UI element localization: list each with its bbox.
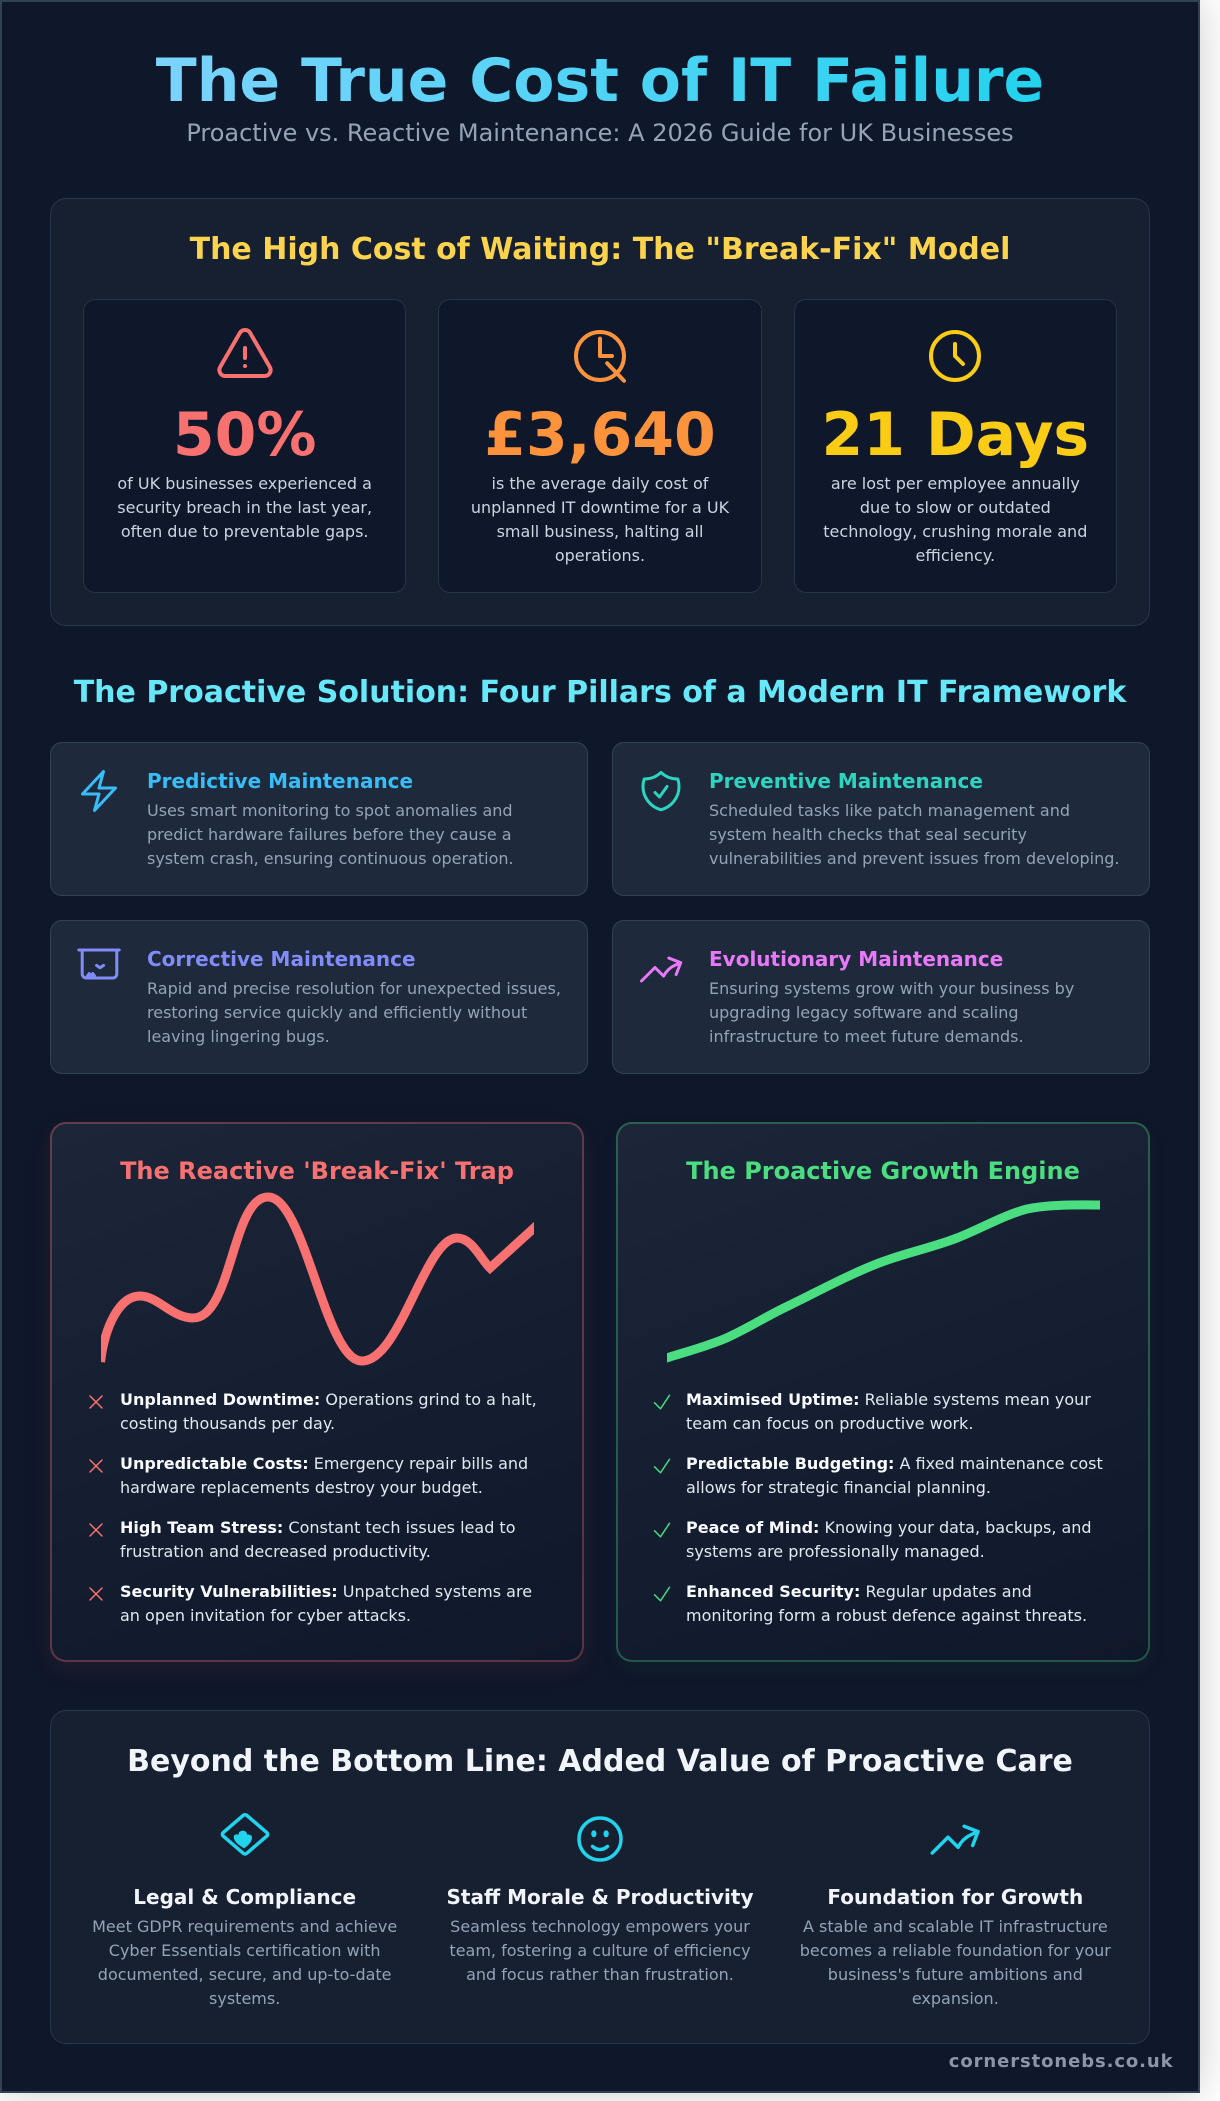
pillar description: Rapid and precise resolution for unexpected issues, xyxy=(147,979,561,998)
item text: Predictable Budgeting: A fixed maintenance cost xyxy=(686,1454,1103,1473)
value description xyxy=(438,1914,762,1986)
list item: security xyxy=(89,1582,532,1625)
icon: lightning bolt xyxy=(81,770,117,812)
subtitle: Proactive vs. Reactive Maintenance: A 2026 Guide for UK Businesses xyxy=(186,119,1014,147)
pillar: predictive xyxy=(50,742,588,896)
icon: clock xyxy=(929,330,981,382)
stat card: days lost xyxy=(794,299,1117,593)
item text xyxy=(686,1518,1092,1561)
stat value: £3,640 xyxy=(484,400,716,470)
value description: Seamless technology empowers your xyxy=(450,1916,750,1936)
pillar title: Corrective Maintenance xyxy=(147,947,416,971)
pillar title: Predictive Maintenance xyxy=(147,769,413,793)
value description: documented, secure, and up-to-date xyxy=(98,1964,392,1984)
stat description: often due to preventable gaps. xyxy=(121,522,368,541)
item text: Peace of Mind: Knowing your data, backups, and xyxy=(686,1518,1092,1537)
pillar description: Uses smart monitoring to spot anomalies and xyxy=(147,801,513,820)
item text xyxy=(120,1454,528,1497)
stat description: is the average daily cost of xyxy=(492,474,708,493)
item text: costing thousands per day. xyxy=(120,1414,335,1433)
pillar description: restoring service quickly and efficiently without xyxy=(147,1003,527,1022)
item text xyxy=(120,1518,516,1561)
chart: rising green line xyxy=(667,1200,1100,1362)
icon: cross xyxy=(89,1523,103,1537)
stat description: unplanned IT downtime for a UK xyxy=(471,498,729,517)
stat description: of UK businesses experienced a xyxy=(117,474,372,493)
panel heading: The Reactive 'Break-Fix' Trap xyxy=(120,1157,514,1185)
stat description: small business, halting all xyxy=(497,522,703,541)
heading: four pillars: The Proactive Solution: Four Pillars of a Modern IT Framework xyxy=(74,675,1126,710)
stat value: 21 Days xyxy=(821,400,1089,470)
value column: growth xyxy=(794,1810,1117,2020)
pillar description xyxy=(709,801,1120,868)
item text: Enhanced Security: Regular updates and xyxy=(686,1582,1032,1601)
pillar description: vulnerabilities and prevent issues from developing. xyxy=(709,849,1120,868)
pillar description: predict hardware failures before they cause a xyxy=(147,825,512,844)
item text: allows for strategic financial planning. xyxy=(686,1478,991,1497)
icon: warning triangle xyxy=(217,328,273,378)
pillar description xyxy=(147,801,514,868)
stat description xyxy=(117,474,372,541)
value description: systems. xyxy=(209,1988,280,2008)
stat description xyxy=(823,474,1087,565)
value description: A stable and scalable IT infrastructure xyxy=(803,1916,1108,1936)
icon: cross xyxy=(89,1395,103,1409)
icon: smiley xyxy=(572,1811,628,1867)
pillar description xyxy=(147,979,561,1046)
value description xyxy=(794,1914,1117,2010)
pillar: evolutionary xyxy=(612,920,1150,1074)
icon: trending arrow xyxy=(640,956,682,983)
value description: expansion. xyxy=(912,1988,999,2008)
item text xyxy=(686,1454,1103,1497)
stat description: efficiency. xyxy=(916,546,995,565)
item text: Unplanned Downtime: Operations grind to a halt, xyxy=(120,1390,537,1409)
item text xyxy=(686,1582,1087,1625)
pillar: corrective xyxy=(50,920,588,1074)
pillar description: system crash, ensuring continuous operation. xyxy=(147,849,514,868)
stat description: are lost per employee annually xyxy=(831,474,1080,493)
footer brand: cornerstonebs.co.uk xyxy=(949,2051,1174,2072)
item text: Security Vulnerabilities: Unpatched systems are xyxy=(120,1582,532,1601)
value description: becomes a reliable foundation for your xyxy=(800,1940,1111,1960)
pillar description: upgrading legacy software and scaling xyxy=(709,1003,1019,1022)
list item: stress xyxy=(89,1518,516,1561)
stat description xyxy=(471,474,730,565)
panel: high cost of waiting xyxy=(50,198,1150,626)
list item: security xyxy=(654,1582,1087,1625)
panel: added value xyxy=(50,1710,1150,2044)
value description xyxy=(83,1914,406,2010)
panel: proactive growth xyxy=(616,1122,1150,1662)
value description: team, fostering a culture of efficiency xyxy=(449,1940,751,1960)
heading: beyond the bottom line: Beyond the Bottom Line: Added Value of Proactive Care xyxy=(127,1744,1073,1779)
icon: check xyxy=(654,1586,670,1602)
pillar title: Evolutionary Maintenance xyxy=(709,947,1003,971)
item text: Maximised Uptime: Reliable systems mean your xyxy=(686,1390,1091,1409)
list item: uptime xyxy=(654,1390,1091,1433)
item text: monitoring form a robust defence against threats. xyxy=(686,1606,1087,1625)
value column: morale xyxy=(438,1810,762,2020)
icon: check xyxy=(654,1394,670,1410)
stat description: security breach in the last year, xyxy=(117,498,372,517)
icon: clock with tail xyxy=(574,330,626,383)
stat card: daily cost xyxy=(438,299,762,593)
value column: legal xyxy=(83,1810,406,2020)
list item: downtime xyxy=(89,1390,537,1433)
pillar description: Ensuring systems grow with your business by xyxy=(709,979,1074,998)
value description: business's future ambitions and xyxy=(828,1964,1083,1984)
item text xyxy=(120,1390,537,1433)
icon: check xyxy=(654,1522,670,1538)
item text: hardware replacements destroy your budget. xyxy=(120,1478,483,1497)
list item: peace of mind xyxy=(654,1518,1092,1561)
item text: frustration and decreased productivity. xyxy=(120,1542,431,1561)
value title: Foundation for Growth xyxy=(827,1885,1083,1909)
value title: Staff Morale & Productivity xyxy=(446,1885,753,1909)
value description: Cyber Essentials certification with xyxy=(109,1940,381,1960)
item text xyxy=(120,1582,532,1625)
pillar description: system health checks that seal security xyxy=(709,825,1027,844)
item text: team can focus on productive work. xyxy=(686,1414,973,1433)
icon: shield check xyxy=(642,770,680,812)
stat description: due to slow or outdated xyxy=(860,498,1051,517)
title: The True Cost of IT Failure xyxy=(156,46,1044,116)
icon: check xyxy=(654,1458,670,1474)
icon: trending arrow xyxy=(927,1811,983,1867)
item text: systems are professionally managed. xyxy=(686,1542,985,1561)
stat description: technology, crushing morale and xyxy=(823,522,1087,541)
item text: an open invitation for cyber attacks. xyxy=(120,1606,411,1625)
stat card: 50% xyxy=(83,299,406,593)
icon: cross xyxy=(89,1587,103,1601)
stat description: operations. xyxy=(555,546,645,565)
heading: break-fix model: The High Cost of Waiting: The "Break-Fix" Model xyxy=(190,232,1010,267)
list item: costs xyxy=(89,1454,528,1497)
list item: budgeting xyxy=(654,1454,1103,1497)
pillar description xyxy=(709,979,1074,1046)
pillar: preventive xyxy=(612,742,1150,896)
value description: and focus rather than frustration. xyxy=(466,1964,734,1984)
item text: High Team Stress: Constant tech issues lead to xyxy=(120,1518,516,1537)
item text: Unpredictable Costs: Emergency repair bills and xyxy=(120,1454,528,1473)
pillar description: infrastructure to meet future demands. xyxy=(709,1027,1024,1046)
icon: cross xyxy=(89,1459,103,1473)
stat value: 50% xyxy=(173,400,316,470)
pillar description: Scheduled tasks like patch management and xyxy=(709,801,1070,820)
pillar description: leaving lingering bugs. xyxy=(147,1027,330,1046)
panel heading: The Proactive Growth Engine xyxy=(686,1157,1080,1185)
value title: Legal & Compliance xyxy=(133,1885,356,1909)
value description: Meet GDPR requirements and achieve xyxy=(92,1916,397,1936)
pillar title: Preventive Maintenance xyxy=(709,769,983,793)
icon: diamond badge xyxy=(217,1811,273,1867)
chart: volatile red line xyxy=(101,1192,534,1366)
item text xyxy=(686,1390,1091,1433)
panel: reactive trap xyxy=(50,1122,584,1662)
icon: tray with chevron xyxy=(77,948,121,980)
